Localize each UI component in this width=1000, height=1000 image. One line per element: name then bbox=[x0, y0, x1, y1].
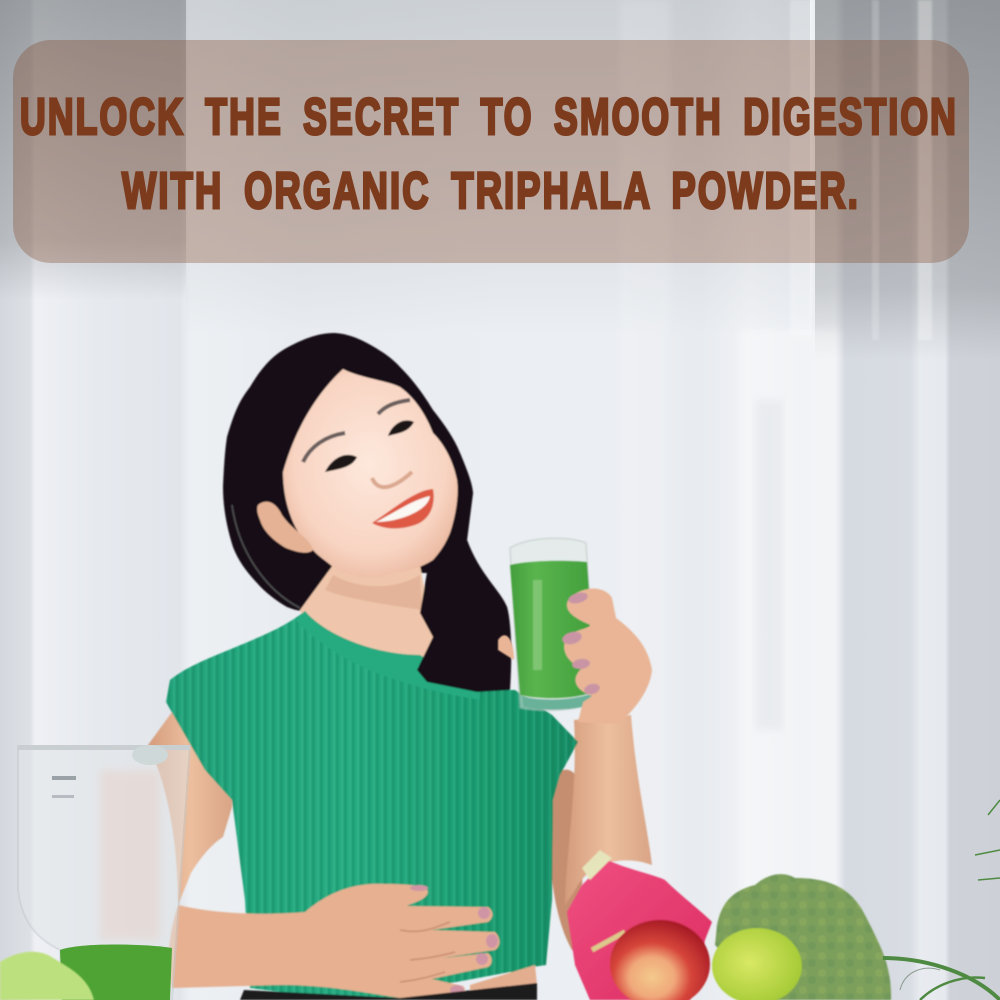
waistband bbox=[240, 983, 537, 1000]
belly hand nails bbox=[410, 885, 498, 995]
lime bbox=[712, 928, 802, 1000]
nose bbox=[372, 472, 412, 487]
belly hand and forearm bbox=[169, 884, 499, 998]
right eye bbox=[388, 420, 414, 436]
hair highlight bbox=[232, 505, 300, 608]
hand holding glass bbox=[498, 588, 652, 724]
collar bbox=[296, 611, 480, 700]
left eye bbox=[325, 455, 357, 472]
neck and chest bbox=[300, 565, 440, 670]
waist skin bbox=[470, 965, 537, 990]
hair back bbox=[223, 333, 510, 690]
glass of green juice bbox=[510, 538, 596, 710]
upper left arm bbox=[148, 712, 232, 905]
title panel bbox=[13, 40, 969, 263]
broccoli bbox=[715, 874, 891, 1000]
glass hand nails bbox=[561, 591, 601, 696]
blender juice bbox=[60, 944, 172, 1000]
face bbox=[283, 369, 458, 578]
neck shadow bbox=[325, 575, 422, 610]
hair front strand bbox=[417, 453, 511, 692]
apple bbox=[610, 920, 710, 1000]
eyebrows bbox=[303, 433, 345, 462]
mouth bbox=[372, 489, 434, 529]
right upper arm bbox=[549, 770, 585, 950]
plant leaves bbox=[883, 800, 1000, 1000]
knuckle shading bbox=[400, 922, 455, 982]
forearm holding glass bbox=[565, 715, 652, 905]
lettuce bbox=[0, 952, 94, 1000]
shirt bbox=[160, 600, 590, 1000]
ear bbox=[257, 502, 313, 553]
dragon fruit bbox=[567, 850, 712, 1000]
woman bbox=[148, 333, 652, 1000]
blender jar bbox=[18, 745, 190, 1000]
